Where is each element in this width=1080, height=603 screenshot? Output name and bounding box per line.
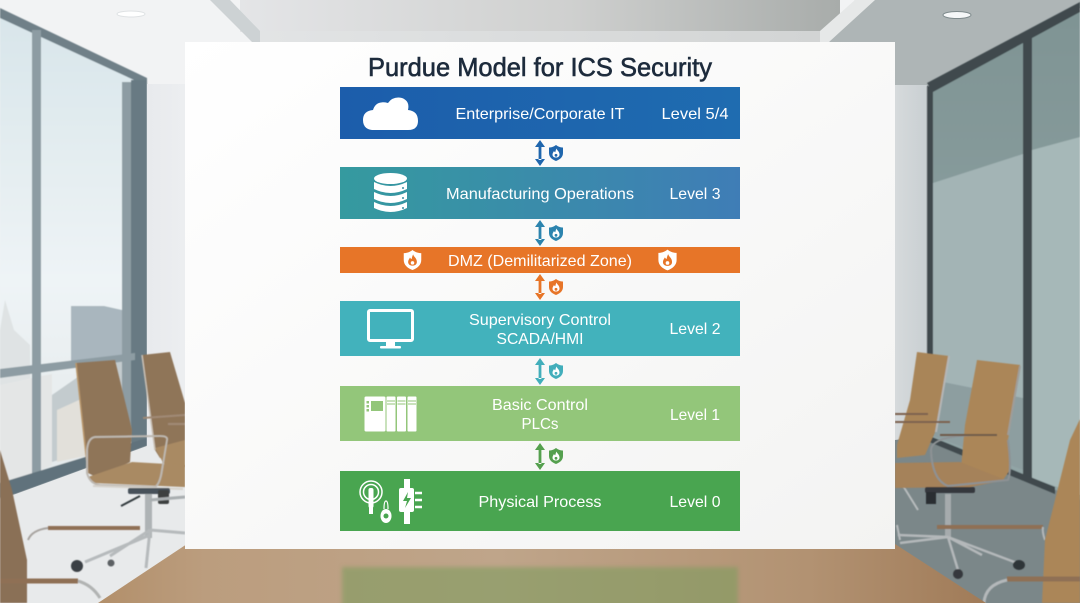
arrow (535, 358, 545, 385)
left wall (147, 84, 185, 446)
connector: supervisory to basic control (535, 358, 563, 385)
layer: basic control: PLCs (522, 416, 558, 433)
glass partition (927, 2, 1080, 500)
layer name: Manufacturing Operations (446, 186, 634, 203)
connector: enterprise to manufacturing (535, 140, 563, 166)
right wall (895, 85, 927, 485)
chair far left (142, 352, 185, 467)
conference table (98, 544, 986, 603)
chair foreground left (0, 450, 100, 603)
icon: shield left (404, 250, 421, 270)
icon: cloud (363, 98, 418, 130)
level label: Level 2 (670, 321, 721, 338)
icon: PLC rack (364, 396, 416, 432)
icon: database (374, 173, 407, 212)
arrow (535, 274, 545, 300)
infographic board (185, 42, 895, 549)
ceiling beam right (820, 0, 875, 42)
right ceiling (829, 0, 1080, 87)
icon: firewall shield (549, 145, 563, 161)
layer: DMZ (340, 247, 740, 273)
ceiling band (260, 31, 820, 43)
connector: manufacturing to DMZ (535, 220, 563, 246)
chair foreground right (984, 419, 1080, 603)
icon: firewall shield (549, 363, 563, 379)
connector: DMZ to supervisory (535, 274, 563, 300)
ceiling beam left (210, 0, 260, 42)
table reflection (342, 567, 738, 603)
arrow (535, 443, 545, 470)
right floor (895, 436, 1080, 603)
layer name: Supervisory Control (469, 312, 611, 329)
level label: Level 1 (670, 407, 720, 424)
chair far right (895, 352, 950, 540)
icon: shield right (658, 250, 677, 270)
layer: enterprise IT (340, 87, 740, 139)
icon: field sensors (360, 479, 422, 524)
layer name: Basic Control (492, 397, 588, 414)
icon: firewall shield (549, 448, 563, 464)
left window (0, 8, 147, 500)
layer: physical process (340, 471, 740, 531)
ceiling centre (240, 0, 840, 32)
title: Purdue Model for ICS Security (368, 52, 712, 82)
icon: monitor (368, 310, 412, 348)
layer name: DMZ (Demilitarized Zone) (448, 253, 632, 270)
layer: supervisory control: SCADA/HMI (496, 331, 584, 348)
level label: Level 3 (670, 186, 721, 203)
connector: basic control to physical process (535, 443, 563, 470)
chair near left (28, 360, 185, 572)
layer name: Physical Process (478, 494, 602, 511)
layer: supervisory control (340, 301, 740, 356)
level label: Level 5/4 (662, 106, 729, 123)
ceiling lights right (943, 12, 971, 18)
icon: firewall shield (549, 279, 563, 295)
arrow (535, 140, 545, 166)
layer: basic control (340, 386, 740, 441)
level label: Level 0 (670, 494, 721, 511)
arrow (535, 220, 545, 246)
chair near right (895, 360, 1045, 579)
layer name: Enterprise/Corporate IT (456, 106, 625, 123)
left floor (0, 446, 185, 603)
layer: manufacturing operations (340, 167, 740, 219)
ceiling light left (117, 11, 145, 17)
icon: firewall shield (549, 225, 563, 241)
